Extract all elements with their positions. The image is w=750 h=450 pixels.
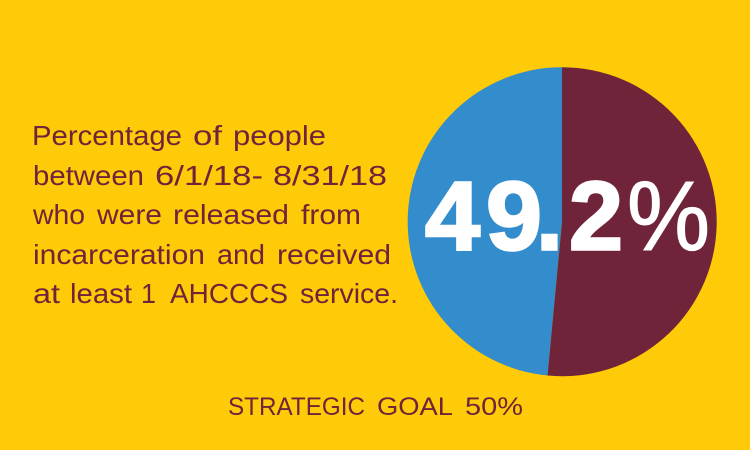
description text block: who	[32, 199, 85, 230]
pie value label	[425, 161, 710, 271]
pie value label: 4	[425, 162, 480, 270]
pie slice: blue remainder	[408, 67, 562, 375]
pie value label: .	[536, 162, 563, 270]
description text block	[32, 120, 398, 309]
strategic goal caption: GOAL	[377, 393, 453, 421]
description text block: at	[33, 278, 60, 309]
description text block: least	[70, 278, 132, 309]
description text block: and	[217, 239, 265, 270]
strategic goal caption: STRATEGIC	[228, 393, 365, 421]
description text block: people	[233, 120, 326, 151]
description text block: of	[193, 120, 222, 151]
description text block: from	[301, 199, 361, 230]
pie slice: maroon share	[548, 67, 717, 376]
description text block: 6/1/18-	[155, 160, 263, 191]
description text block: AHCCCS	[170, 278, 288, 309]
description text block: between	[33, 160, 144, 191]
pie value label: 2	[569, 162, 623, 270]
strategic goal caption: 50%	[465, 393, 523, 421]
description text block: released	[173, 199, 289, 230]
description text block: incarceration	[33, 239, 205, 270]
description text block: Percentage	[32, 120, 182, 151]
description text block: service.	[300, 278, 398, 309]
description text block: 1	[141, 278, 156, 309]
pie chart: 49.2%	[408, 67, 717, 376]
pie value label: %	[627, 161, 710, 271]
pie value label: 9	[486, 162, 542, 270]
description text block: received	[277, 239, 391, 270]
description text block: 8/31/18	[273, 160, 387, 191]
description text block: were	[96, 199, 162, 230]
